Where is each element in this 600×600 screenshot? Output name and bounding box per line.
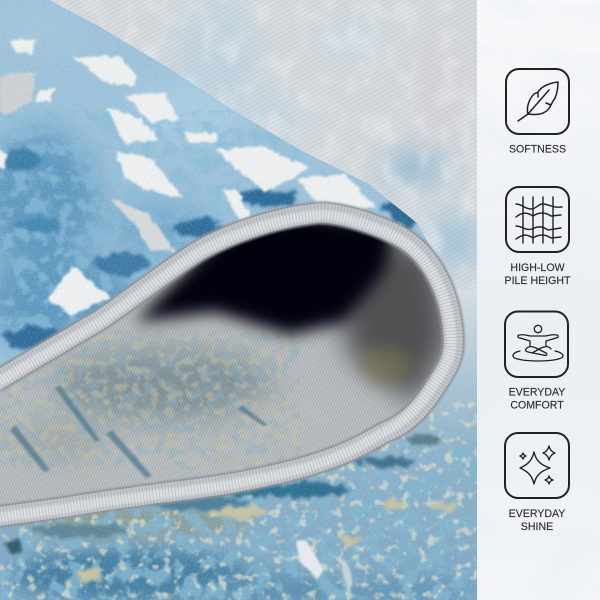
feature: high-low pile height: PILE HEIGHT	[505, 275, 571, 287]
icon: pile grid	[506, 187, 569, 252]
feature: high-low pile height	[505, 187, 571, 287]
underside of the rug with woven back	[0, 222, 444, 506]
label: everyday shine: EVERYDAY	[509, 508, 565, 520]
icon: feather	[506, 69, 569, 134]
rug binding: rolled rope edge	[0, 213, 453, 518]
side panel background	[477, 0, 600, 600]
rolled rug top: blue pile with white pattern	[0, 0, 432, 368]
label: everyday comfort: EVERYDAY	[509, 386, 565, 398]
label: softness: SOFTNESS	[509, 144, 566, 156]
white pattern patches	[0, 40, 376, 315]
label: high-low pile height: HIGH-LOW	[510, 262, 565, 274]
feature: everyday shine: SHINE	[521, 521, 553, 533]
icon: sparkles	[505, 433, 569, 498]
feature: everyday comfort: COMFORT	[510, 400, 564, 412]
feature: everyday comfort	[505, 312, 568, 412]
icon: meditating figure	[505, 312, 568, 377]
feature: softness	[506, 69, 569, 156]
floor: blue rug in the foreground	[0, 290, 477, 600]
feature: everyday shine	[505, 433, 569, 533]
background: flat rug surface behind the fold	[0, 0, 477, 320]
shadow inside the fold	[135, 205, 450, 405]
